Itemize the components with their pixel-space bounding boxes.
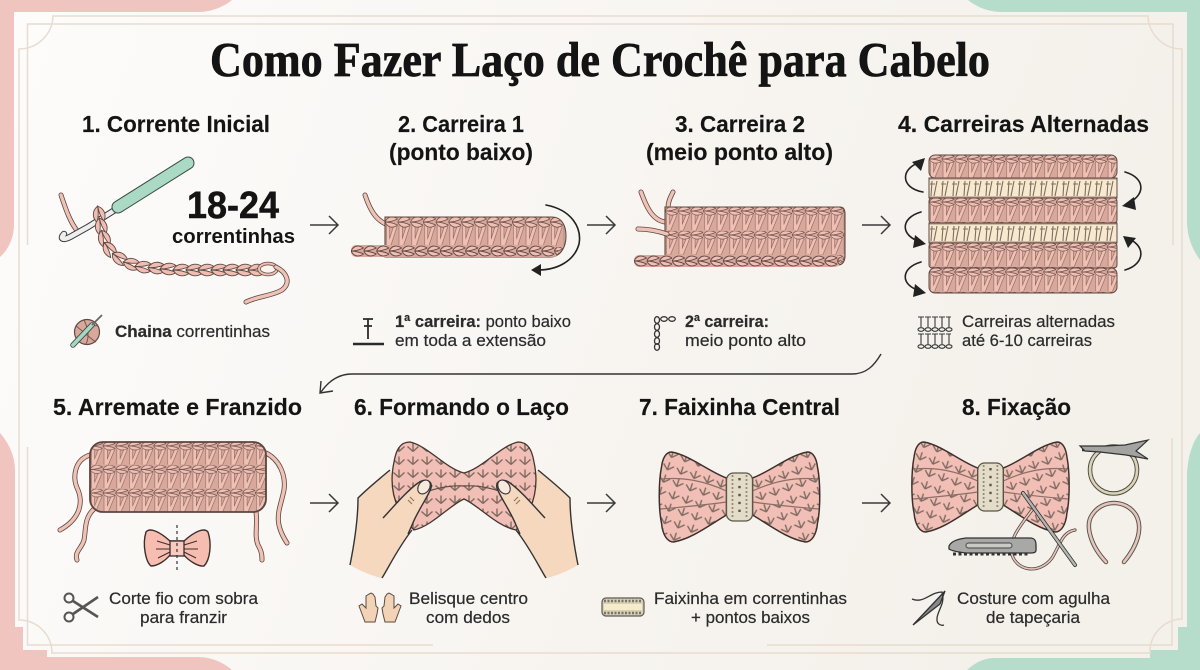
heading: step 1: 1. Corrente Inicial xyxy=(82,111,270,137)
illustration: hands pinching bow xyxy=(350,442,578,578)
caption: step 7: Faixinha em correntinhas xyxy=(654,590,847,608)
corner: green top right xyxy=(968,0,1200,260)
caption: step 7 xyxy=(654,590,847,627)
icon: band xyxy=(602,598,644,616)
icon: yarn ball and hook xyxy=(73,315,102,345)
caption: step 6 xyxy=(409,590,528,627)
panel: step 6 xyxy=(350,394,578,627)
illustration: bow xyxy=(912,442,1069,532)
icon: needle and thread xyxy=(912,591,945,625)
curved arrow: turn row xyxy=(538,205,580,270)
icon: single crochet symbol xyxy=(353,319,384,344)
subheading: step 3: (meio ponto alto) xyxy=(646,139,833,165)
subheading: step 2: (ponto baixo) xyxy=(389,139,533,165)
panel: step 5 xyxy=(53,394,302,627)
caption: step 2: em toda a extensão xyxy=(395,332,546,350)
arrow: step 3 to 4 xyxy=(862,216,890,234)
illustration: second row xyxy=(634,192,845,267)
caption: step 4 xyxy=(962,313,1115,350)
arrow head: turn row xyxy=(531,264,541,276)
caption: step 1: Chaina correntinhas xyxy=(115,323,270,341)
caption: step 4: Carreiras alternadas xyxy=(962,313,1115,331)
arrow: step 5 to 6 xyxy=(310,494,338,512)
caption: step 3: 2ª carreira: xyxy=(685,313,769,331)
caption: step 5 xyxy=(109,590,259,627)
caption: step 6: Belisque centro xyxy=(409,590,528,608)
caption: step 2: 1ª carreira: ponto baixo xyxy=(395,313,571,331)
heading: step 6: 6. Formando o Laço xyxy=(354,394,569,420)
illustration: bow with centre band xyxy=(659,452,820,542)
illustration: alligator clip xyxy=(949,538,1036,554)
caption: step 8: Costure com agulha xyxy=(957,590,1111,608)
chain count label: correntinhas xyxy=(172,226,295,248)
icon: chain symbol xyxy=(654,317,675,350)
caption: step 2 xyxy=(395,313,571,350)
caption: step 5: Corte fio com sobra xyxy=(109,590,259,608)
illustration: headband xyxy=(1089,503,1139,562)
chain count: 18-24 xyxy=(187,185,279,227)
icon: two hands xyxy=(359,593,401,622)
arrow: step 6 to 7 xyxy=(587,494,615,512)
icon: stitch chart xyxy=(918,317,952,348)
panel: step 4 xyxy=(898,111,1149,350)
corner: green bottom right xyxy=(967,433,1200,670)
caption: step 7: + pontos baixos xyxy=(691,609,810,627)
heading: step 5: 5. Arremate e Franzido xyxy=(53,394,302,420)
turning arrows xyxy=(905,158,1141,297)
arrow: step 1 to 2 xyxy=(310,216,338,234)
arrow: step 7 to 8 xyxy=(862,494,890,512)
caption: step 6: com dedos xyxy=(426,609,510,627)
icon: scissors xyxy=(64,594,98,622)
caption: step 8 xyxy=(957,590,1111,627)
panel: step 8 xyxy=(912,394,1148,627)
illustration: hair elastic clip xyxy=(1080,440,1148,494)
illustration: small bow diagram xyxy=(144,525,210,572)
caption: step 4: até 6-10 carreiras xyxy=(962,332,1092,350)
caption: step 3 xyxy=(685,313,806,350)
panel: step 1 xyxy=(61,111,295,345)
caption: step 8: de tapeçaria xyxy=(986,609,1081,627)
illustration: thread xyxy=(1011,510,1075,569)
caption: step 3: meio ponto alto xyxy=(685,332,806,350)
illustration: tapestry needle xyxy=(1023,493,1075,565)
heading: step 4: 4. Carreiras Alternadas xyxy=(898,111,1149,137)
panel: step 7 xyxy=(602,394,847,627)
illustration: first row xyxy=(351,195,566,257)
illustration: crochet hook and chain xyxy=(61,163,287,302)
caption: step 5: para franzir xyxy=(140,609,228,627)
heading: step 3: 3. Carreira 2 xyxy=(675,111,805,137)
panel: step 3 xyxy=(634,111,845,350)
illustration: finished strip with tails xyxy=(60,442,287,560)
corner: pink top left xyxy=(0,0,232,257)
arrow: step 2 to 3 xyxy=(587,216,615,234)
arrow: row 1 to row 2 xyxy=(320,354,881,393)
illustration: alternating rows xyxy=(929,155,1117,293)
heading: step 8: 8. Fixação xyxy=(962,394,1071,420)
title: Como Fazer Laço de Crochê para Cabelo xyxy=(210,32,990,87)
corner: pink bottom left xyxy=(0,433,232,670)
panel: step 2 xyxy=(351,111,580,350)
heading: step 2: 2. Carreira 1 xyxy=(398,111,524,137)
heading: step 7: 7. Faixinha Central xyxy=(639,394,840,420)
